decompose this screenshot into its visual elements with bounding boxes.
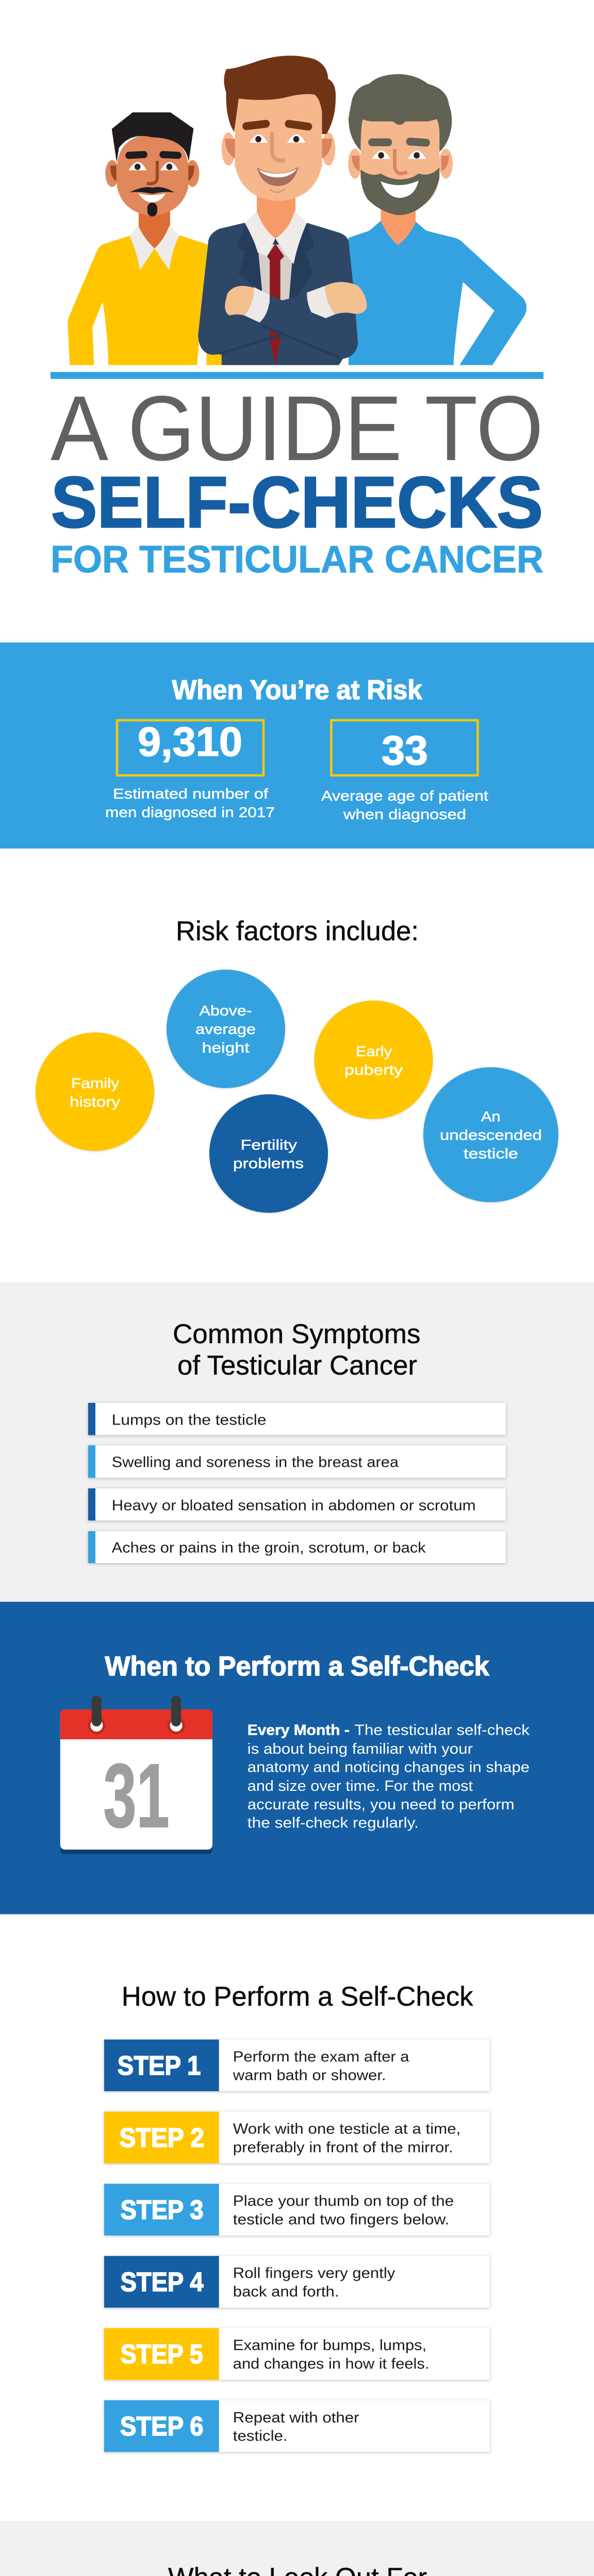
- title rule: [51, 372, 543, 379]
- heading: of Testicular Cancer: [177, 1350, 417, 1381]
- step 6: [104, 2400, 490, 2452]
- icon: calendar: [60, 1696, 212, 1854]
- step 2: [104, 2112, 490, 2163]
- man in yellow sweater: [68, 112, 223, 365]
- symptom: heavy sensation: [88, 1488, 506, 1520]
- step 6: testicle.: [233, 2428, 288, 2445]
- heading: When to Perform a Self-Check: [105, 1651, 489, 1682]
- step 3: testicle and two fingers below.: [233, 2212, 449, 2228]
- risk factor: family history: [36, 1032, 154, 1151]
- text block: every month: [248, 1722, 530, 1831]
- risk factor: early puberty: [315, 1001, 433, 1119]
- step 5: [104, 2328, 490, 2380]
- man in blue shirt: [348, 74, 526, 365]
- risk factor: early puberty: Early: [356, 1043, 392, 1059]
- heading: Common Symptoms: [173, 1319, 421, 1349]
- text block: every month: is about being familiar with your: [248, 1741, 473, 1757]
- step 3: [104, 2184, 490, 2235]
- heading: When You’re at Risk: [172, 675, 422, 705]
- risk factor: fertility problems: Fertility: [240, 1137, 297, 1153]
- step 1: [104, 2040, 490, 2091]
- stat: 9,310: Estimated number of: [113, 786, 268, 802]
- symptom: heavy sensation: Heavy or bloated sensation in abdomen or scrotum: [112, 1497, 476, 1514]
- panel: common symptoms: [0, 1282, 594, 1602]
- step 6: Repeat with other: [233, 2410, 359, 2426]
- risk factor: above-average height: height: [202, 1040, 250, 1056]
- stat: 33: Average age of patient: [321, 788, 488, 804]
- risk factor: family history: Family: [71, 1075, 119, 1091]
- title: FOR TESTICULAR CANCER: FOR TESTICULAR CANCER: [51, 538, 543, 581]
- heading: [173, 1319, 421, 1381]
- step 5: Examine for bumps, lumps,: [233, 2337, 426, 2354]
- risk factor: family history: history: [70, 1094, 120, 1110]
- symptom: swelling: [88, 1445, 506, 1478]
- step 2: Work with one testicle at a time,: [233, 2121, 460, 2138]
- step 3: STEP 3: [121, 2195, 203, 2225]
- stat: 33: 33: [382, 727, 428, 773]
- text block: every month: anatomy and noticing changes in shape: [248, 1759, 530, 1776]
- step 5: STEP 5: [121, 2340, 203, 2369]
- step 4: Roll fingers very gently: [233, 2265, 395, 2282]
- symptom: aches: [88, 1531, 506, 1563]
- step 1: warm bath or shower.: [233, 2067, 386, 2083]
- step 4: STEP 4: [121, 2267, 204, 2297]
- stat: 33: [321, 720, 488, 822]
- symptom: swelling: Swelling and soreness in the breast area: [112, 1454, 399, 1471]
- panel: when you're at risk: [0, 642, 594, 849]
- step 1: STEP 1: [118, 2051, 201, 2081]
- step 2: preferably in front of the mirror.: [233, 2139, 453, 2156]
- heading: how to perform: How to Perform a Self-Check: [122, 1981, 473, 2012]
- step 4: back and forth.: [233, 2284, 339, 2300]
- symptom: lumps: [88, 1403, 506, 1435]
- text block: every month: accurate results, you need to perform: [248, 1797, 515, 1813]
- stat: 9,310: [105, 719, 275, 820]
- step 2: STEP 2: [119, 2123, 204, 2153]
- text block: every month: Every Month -: [248, 1722, 350, 1739]
- stat: 9,310: men diagnosed in 2017: [105, 804, 275, 820]
- risk factor: undescended testicle: An: [481, 1109, 500, 1124]
- risk factor: undescended testicle: undescended: [440, 1127, 542, 1143]
- panel: what to look out for: [0, 2521, 594, 2576]
- symptom: aches: Aches or pains in the groin, scrotum, or back: [112, 1539, 426, 1556]
- risk factor: undescended testicle: testicle: [464, 1146, 518, 1161]
- heading: risk factors: Risk factors include:: [176, 916, 419, 946]
- risk factor: above-average height: average: [195, 1021, 256, 1037]
- risk factor: early puberty: puberty: [344, 1062, 403, 1078]
- step 5: and changes in how it feels.: [233, 2356, 429, 2372]
- title: SELF-CHECKS: SELF-CHECKS: [51, 462, 543, 543]
- panel: when to perform a self-check: [0, 1602, 594, 1914]
- text block: every month: and size over time. For the most: [248, 1778, 473, 1794]
- icon: calendar: 31: [104, 1745, 170, 1846]
- stat: 33: when diagnosed: [343, 806, 466, 822]
- step 6: STEP 6: [120, 2412, 203, 2442]
- step 3: Place your thumb on top of the: [233, 2193, 454, 2210]
- risk factor: undescended testicle: [423, 1067, 558, 1202]
- risk factor: above-average height: Above-: [199, 1003, 252, 1019]
- risk factor: above-average height: [167, 970, 285, 1088]
- text block: every month: The testicular self-check: [355, 1722, 530, 1739]
- title: A GUIDE TO: A GUIDE TO: [51, 377, 543, 480]
- stat: 9,310: 9,310: [138, 719, 242, 765]
- text block: every month: the self-check regularly.: [248, 1815, 419, 1831]
- step 1: Perform the exam after a: [233, 2048, 409, 2065]
- man in navy suit: [198, 56, 367, 365]
- risk factor: fertility problems: problems: [233, 1156, 304, 1172]
- risk factor: fertility problems: [209, 1094, 328, 1213]
- symptom: lumps: Lumps on the testicle: [112, 1412, 266, 1429]
- step 4: [104, 2256, 490, 2308]
- illustration: three men: [68, 56, 526, 365]
